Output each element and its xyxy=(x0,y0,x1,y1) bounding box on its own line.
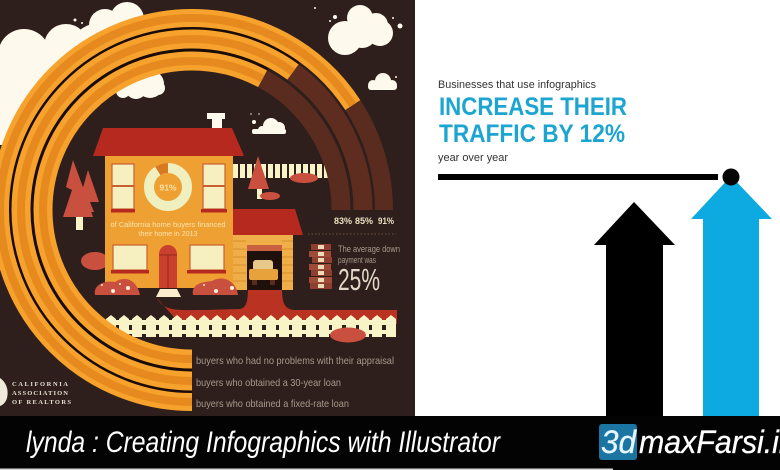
cloud: large left xyxy=(0,2,144,145)
lower fence xyxy=(105,315,396,337)
arc chart: three rings xyxy=(0,18,384,402)
bush: front left xyxy=(95,279,140,295)
down payment text: The average down xyxy=(338,244,400,255)
financed text: of California home buyers financed xyxy=(110,220,226,229)
course title: lynda : Creating Infographics with Illustrator xyxy=(26,426,501,459)
percent labels: 85% xyxy=(355,216,374,227)
garage xyxy=(233,209,303,290)
door step xyxy=(156,289,181,297)
chimney xyxy=(207,113,225,129)
legend labels: buyers who had no problems with their appraisal xyxy=(196,355,394,367)
bush: by tree xyxy=(260,192,280,200)
headline: TRAFFIC BY 12% xyxy=(439,120,625,148)
tree: right xyxy=(248,156,269,199)
down payment text: payment was xyxy=(338,255,376,266)
legend labels xyxy=(196,355,394,410)
lower window right xyxy=(187,245,226,274)
bush: front right xyxy=(193,279,238,295)
arrow: blue xyxy=(691,176,772,417)
percent labels: 91% xyxy=(378,216,394,227)
dotted divider xyxy=(308,233,396,235)
logo: California Association of Realtors xyxy=(0,378,71,406)
donut chart 91% xyxy=(149,168,187,206)
cloud: under arc xyxy=(116,70,165,99)
big 25%: 25% xyxy=(338,262,380,297)
legend labels: buyers who obtained a 30-year loan xyxy=(196,377,341,389)
intro text: Businesses that use infographics xyxy=(438,79,596,91)
door xyxy=(159,245,177,288)
sky dots xyxy=(74,7,402,124)
circle marker xyxy=(722,168,740,186)
logo: California Association of Realtors: OF REALTORS xyxy=(12,399,71,406)
ring: inner, 91% xyxy=(43,61,341,359)
logo: California Association of Realtors: ASSOCIATION xyxy=(12,390,68,397)
percent labels: 83% xyxy=(334,216,353,227)
year over year: year over year xyxy=(438,152,508,164)
ring: middle, 85% xyxy=(21,39,363,381)
donut chart 91%: 91% xyxy=(159,182,177,192)
down payment text xyxy=(338,244,400,266)
house body xyxy=(93,128,244,288)
ring gaps xyxy=(10,28,299,392)
upper window left xyxy=(111,164,135,212)
panel: traffic statistic xyxy=(438,79,772,417)
car xyxy=(249,260,278,285)
financed text xyxy=(110,220,226,238)
icon: money stack xyxy=(309,244,332,289)
title banner xyxy=(0,416,780,470)
cloud: near house xyxy=(252,118,286,134)
financed text: their home in 2013 xyxy=(138,229,198,238)
panel: housing infographic xyxy=(0,0,415,416)
logo: California Association of Realtors: CALIFORNIA xyxy=(12,381,68,388)
driveway xyxy=(157,288,397,324)
arrow: black xyxy=(594,202,675,417)
headline: INCREASE THEIR xyxy=(439,93,627,121)
ring: outer, 83% xyxy=(0,18,384,402)
percent labels xyxy=(334,216,394,227)
logo: 3dmaxFarsi: 3d xyxy=(601,424,637,460)
lower window left xyxy=(111,245,149,274)
cloud: small right xyxy=(368,73,397,90)
roof xyxy=(93,128,244,156)
bush: upper fence xyxy=(290,173,318,183)
trees: left xyxy=(63,160,99,230)
bush: on lower fence xyxy=(330,328,366,342)
cloud: top right xyxy=(328,5,393,55)
upper fence xyxy=(233,164,328,178)
legend labels: buyers who obtained a fixed-rate loan xyxy=(196,398,349,410)
bush: left behind house xyxy=(81,252,109,270)
headline xyxy=(439,93,627,148)
baseline bar xyxy=(438,174,718,180)
upper window right xyxy=(201,164,227,212)
